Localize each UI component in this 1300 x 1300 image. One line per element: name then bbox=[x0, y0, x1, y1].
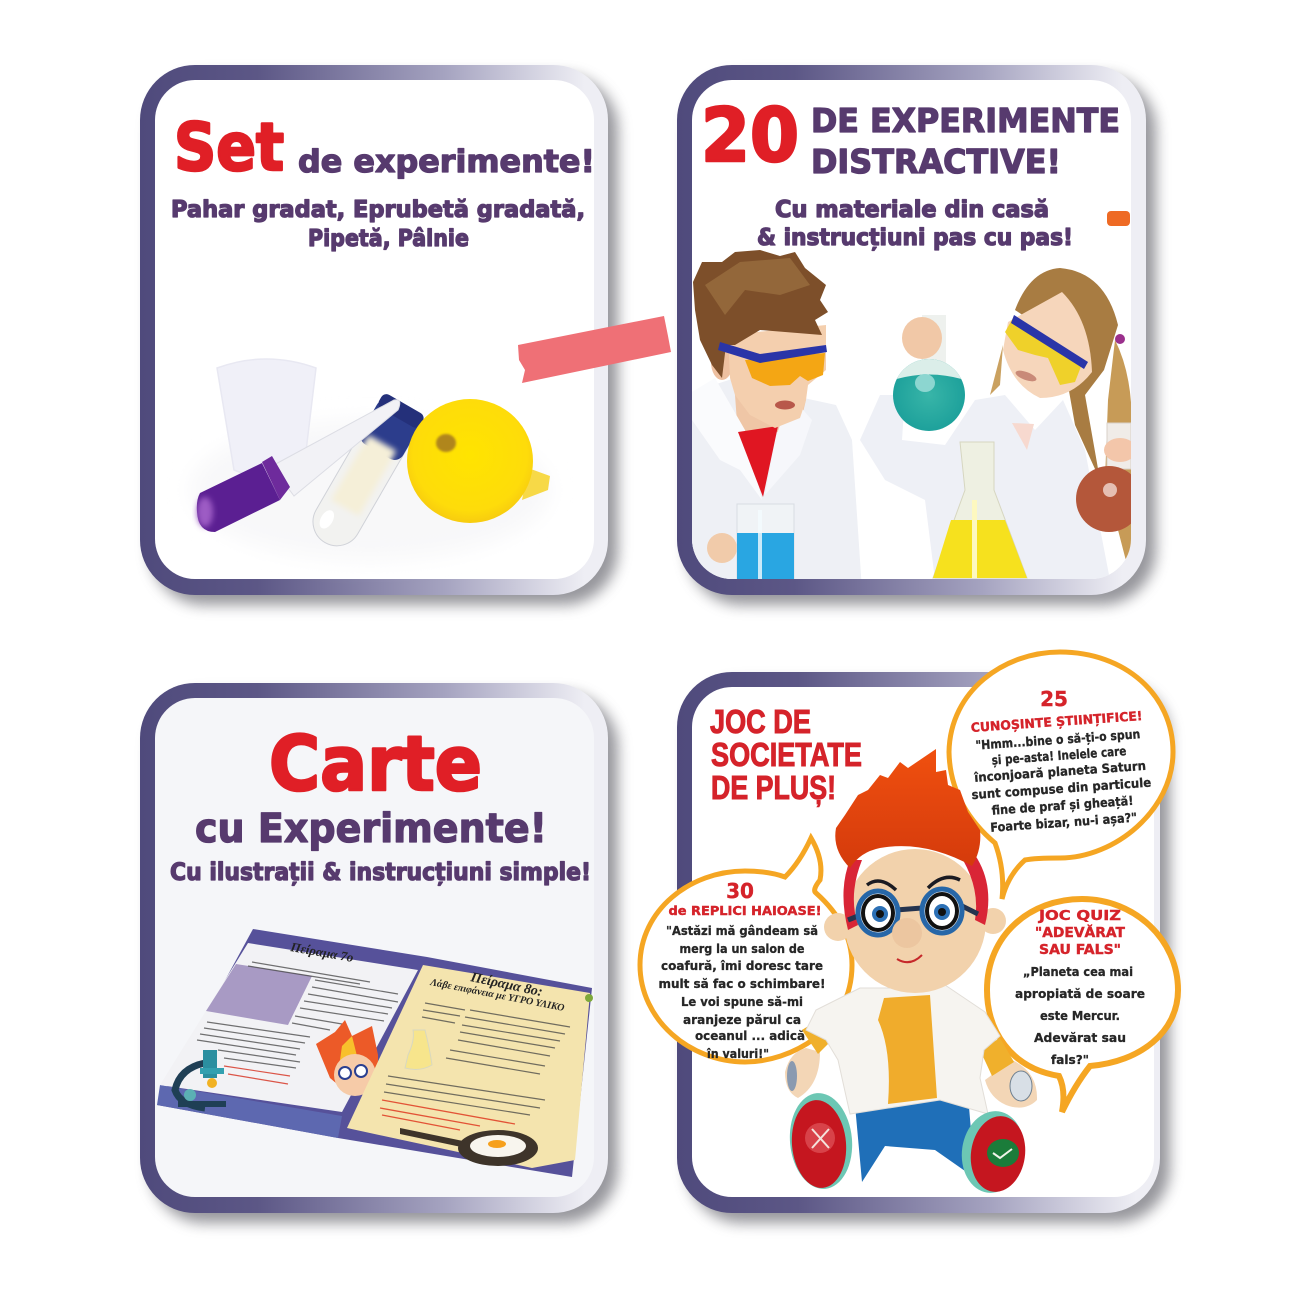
text: item list: Pipetă, Pâlnie bbox=[308, 226, 469, 252]
mouth bbox=[897, 955, 922, 962]
left page: Πείραμα 7ο bbox=[288, 939, 355, 965]
jeans bbox=[855, 1095, 975, 1182]
heading: joc de societate bbox=[710, 703, 862, 807]
speech bubble: joc quiz: JOC QUIZ bbox=[1038, 909, 1121, 924]
heading: joc de societate: DE PLUȘ! bbox=[711, 769, 836, 807]
icon: teal round flask bbox=[890, 315, 968, 431]
icon: frying pan with egg bbox=[400, 1128, 538, 1166]
speech bubble: 30 replici: coafură, îmi doresc tare bbox=[661, 958, 823, 973]
speech bubble: joc quiz: Adevărat sau bbox=[1034, 1030, 1126, 1045]
text: item list: Pahar gradat, Eprubetă gradată, bbox=[171, 197, 585, 223]
speech bubble: 30 replici bbox=[640, 838, 852, 1062]
right sleeve and hand bbox=[980, 1038, 1037, 1108]
photo: children with flasks bbox=[692, 250, 1142, 590]
text: item list bbox=[171, 197, 585, 252]
icon: test tube bbox=[304, 392, 426, 555]
speech bubble: joc quiz: „Planeta cea mai bbox=[1023, 964, 1133, 979]
speech bubble: joc quiz bbox=[987, 899, 1178, 1112]
speech bubble: 30 replici: aranjeze părul ca bbox=[683, 1012, 801, 1027]
speech bubble: 30 replici: "Astăzi mă gândeam să bbox=[666, 923, 818, 938]
left foot bbox=[786, 1090, 856, 1192]
heading: Set: Set bbox=[174, 109, 284, 186]
panel: set de experimente bbox=[140, 65, 618, 605]
speech bubble: 25 cunostinte: CUNOȘINTE ȘTIINȚIFICE! bbox=[970, 708, 1143, 735]
heading: joc de societate: SOCIETATE bbox=[711, 736, 862, 773]
yellow shirt bbox=[878, 995, 937, 1104]
head bbox=[844, 849, 986, 993]
right page: Πείραμα 8ο: bbox=[468, 970, 544, 1000]
speech bubble: joc quiz: SAU FALS" bbox=[1039, 943, 1121, 958]
speech bubble: 25 cunostinte: Foarte bizar, nu-i așa?" bbox=[990, 810, 1138, 835]
speech bubble: 30 replici: Le voi spune să-mi bbox=[681, 994, 803, 1009]
heading: joc de societate: JOC DE bbox=[710, 703, 811, 740]
eyebrows bbox=[867, 877, 960, 890]
icon: measuring cup bbox=[217, 359, 316, 476]
glasses bbox=[848, 889, 978, 935]
illustration: plush scientist bbox=[785, 749, 1037, 1197]
figure: boy bbox=[692, 250, 862, 590]
photo: lab tools bbox=[190, 359, 550, 560]
icon: yellow erlenmeyer flask bbox=[933, 442, 1027, 578]
speech bubble: 25 cunostinte: fine de praf și gheață! bbox=[991, 793, 1134, 818]
speech bubble: 25 cunostinte: sunt compuse din particule bbox=[971, 775, 1152, 802]
heading: cu Experimente: cu Experimente! bbox=[195, 806, 547, 852]
illustration: open booklet bbox=[157, 929, 593, 1177]
left page bbox=[160, 939, 418, 1112]
red side hair bbox=[843, 855, 988, 930]
panel: joc de societate de plus bbox=[640, 652, 1178, 1223]
text: materials: Cu materiale din casă bbox=[775, 197, 1049, 223]
icon: brown flask bbox=[1076, 422, 1131, 532]
speech bubble: 30 replici: mult să fac o schimbare! bbox=[658, 976, 826, 991]
icon: yellow funnel bbox=[407, 399, 550, 523]
panel: 20 de experimente distractive bbox=[677, 65, 1156, 605]
orange hair bbox=[835, 749, 980, 868]
heading: 20: 20 bbox=[701, 93, 799, 179]
speech bubble: joc quiz: este Mercur. bbox=[1040, 1008, 1120, 1023]
speech bubble: 30 replici: merg la un salon de bbox=[680, 941, 804, 956]
icon: dropper bbox=[197, 400, 400, 532]
panel: carte cu experimente bbox=[140, 683, 618, 1223]
speech bubble: 30 replici: în valuri!" bbox=[706, 1046, 769, 1061]
speech bubble: 30 replici: de REPLICI HAIOASE! bbox=[668, 904, 822, 918]
speech bubble: 30 replici: oceanul ... adică bbox=[695, 1028, 805, 1043]
icon: orange mark bbox=[1107, 211, 1130, 226]
text: materials: & instrucțiuni pas cu pas! bbox=[757, 225, 1073, 251]
right page bbox=[347, 965, 593, 1168]
speech bubble: joc quiz: fals?" bbox=[1051, 1052, 1089, 1067]
figure: girl bbox=[860, 268, 1142, 580]
heading: Carte: Carte bbox=[269, 719, 482, 808]
heading: de experimente distractive: DE EXPERIMENTE bbox=[811, 101, 1120, 140]
icon: scientist head bbox=[316, 1020, 378, 1096]
speech bubble: 25 cunostinte: și pe-asta! Inelele care bbox=[991, 743, 1127, 768]
heading: de experimente distractive bbox=[811, 101, 1120, 181]
right foot bbox=[957, 1107, 1030, 1197]
speech bubble: 25 cunostinte: "Hmm...bine o să-ți-o spun bbox=[975, 726, 1141, 753]
speech bubble: joc quiz: "ADEVĂRAT bbox=[1035, 925, 1125, 941]
right page: Λάβε επιφάνεια με ΥΓΡΟ ΥΛΙΚΟ bbox=[428, 977, 565, 1014]
number: 30: 30 bbox=[726, 879, 754, 903]
lab coat bbox=[806, 985, 1000, 1114]
speech bubble: joc quiz: apropiată de soare bbox=[1015, 986, 1145, 1001]
heading: de experimente: de experimente! bbox=[298, 144, 595, 180]
nose bbox=[892, 918, 922, 948]
text: materials bbox=[757, 197, 1073, 251]
left sleeve and hand bbox=[785, 1016, 832, 1098]
tape strip bbox=[518, 316, 671, 383]
icon: blue beaker bbox=[737, 504, 794, 584]
icon: microscope bbox=[175, 1050, 226, 1108]
text: illustrations: Cu ilustrații & instrucțiuni simple! bbox=[170, 858, 591, 886]
heading: de experimente distractive: DISTRACTIVE! bbox=[811, 142, 1061, 181]
speech bubble: 25 cunostinte: înconjoară planeta Saturn bbox=[973, 758, 1146, 785]
number: 25: 25 bbox=[1040, 687, 1068, 711]
speech bubble: 25 cunostinte bbox=[949, 652, 1173, 899]
